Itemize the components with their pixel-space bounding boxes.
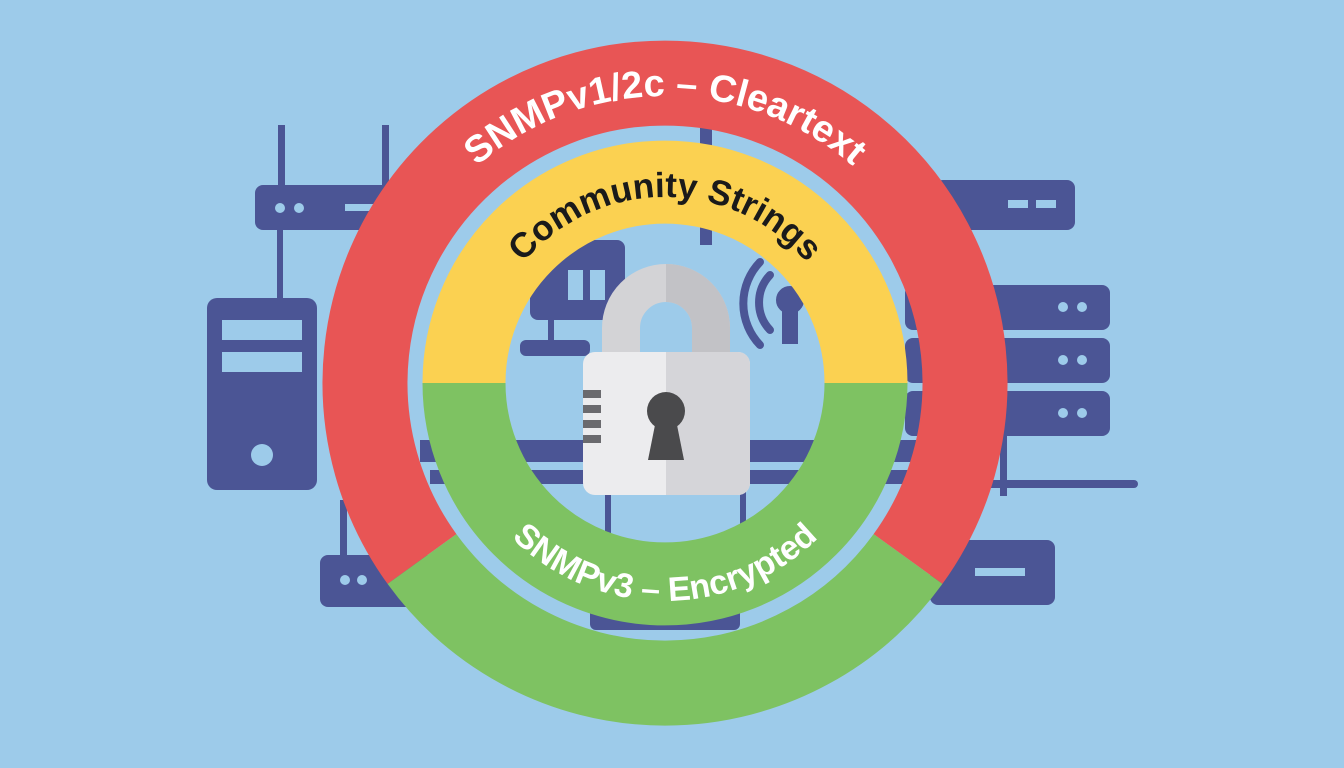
label: Community Strings: Community Strings [510, 172, 818, 260]
device: bottom left router [320, 500, 440, 607]
background: network devices [207, 125, 1138, 630]
device: center boxes [420, 125, 920, 630]
icon: wifi waves [743, 262, 800, 345]
device: left router [255, 125, 395, 300]
ring: inner yellow/green [464, 182, 866, 584]
device: left tower [207, 298, 317, 490]
label: SNMPv3 – Encrypted: SNMPv3 – Encrypted [515, 521, 817, 601]
ring: outer red/green [365, 83, 965, 683]
device: right rack [905, 180, 1138, 605]
label: SNMPv1/2c – Cleartext: SNMPv1/2c – Cleartext [465, 71, 866, 166]
icon: padlock [583, 283, 750, 495]
